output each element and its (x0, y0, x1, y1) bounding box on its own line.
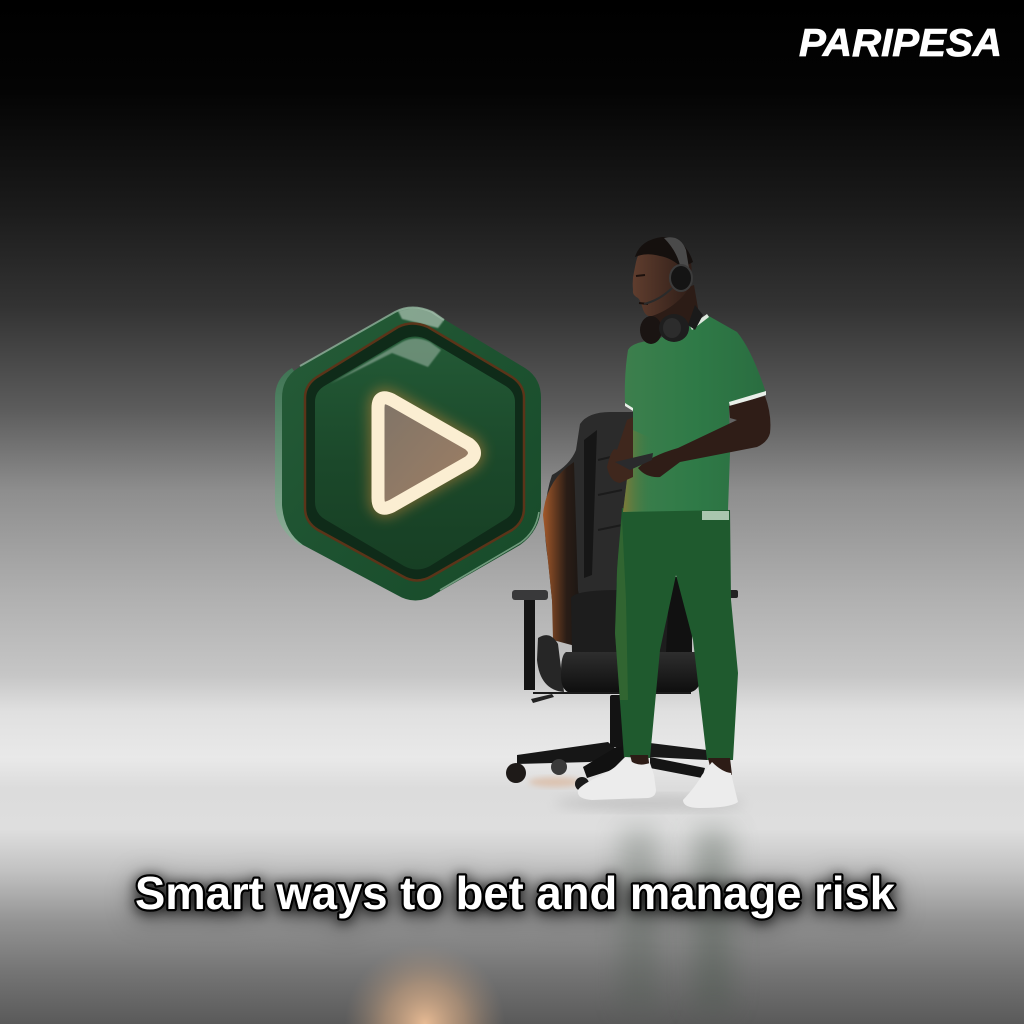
sleeve trim (625, 314, 766, 520)
headphones around neck (640, 305, 703, 344)
icon: hexagon play button (275, 308, 541, 601)
hexagon outer body (282, 308, 541, 601)
neck (650, 285, 700, 340)
headset on head (644, 237, 692, 304)
hexagon dark groove (305, 324, 524, 580)
hexagon left edge (275, 368, 320, 545)
shirt (623, 315, 766, 512)
hair (635, 237, 693, 268)
logo: PARIPESA (799, 22, 1002, 65)
chair seat (561, 652, 701, 693)
play triangle glow (378, 398, 474, 508)
chair armrests (512, 590, 738, 690)
white sneakers (578, 757, 738, 808)
head (633, 237, 693, 316)
person (578, 237, 770, 808)
chair lumbar cushion (571, 590, 692, 652)
chair backrest (545, 412, 640, 640)
trousers (615, 508, 738, 760)
shirt warm light (623, 430, 655, 512)
play triangle (378, 398, 474, 508)
title: Smart ways to bet and manage risk (135, 867, 895, 919)
chair side bolster (537, 635, 564, 692)
chair base and wheels (506, 694, 707, 791)
hexagon inner face (315, 336, 515, 570)
game controller (615, 453, 653, 470)
floor reflections (345, 777, 745, 1024)
facial features (636, 275, 648, 304)
ankles (630, 755, 732, 775)
chair (506, 412, 738, 791)
arms (607, 396, 770, 483)
